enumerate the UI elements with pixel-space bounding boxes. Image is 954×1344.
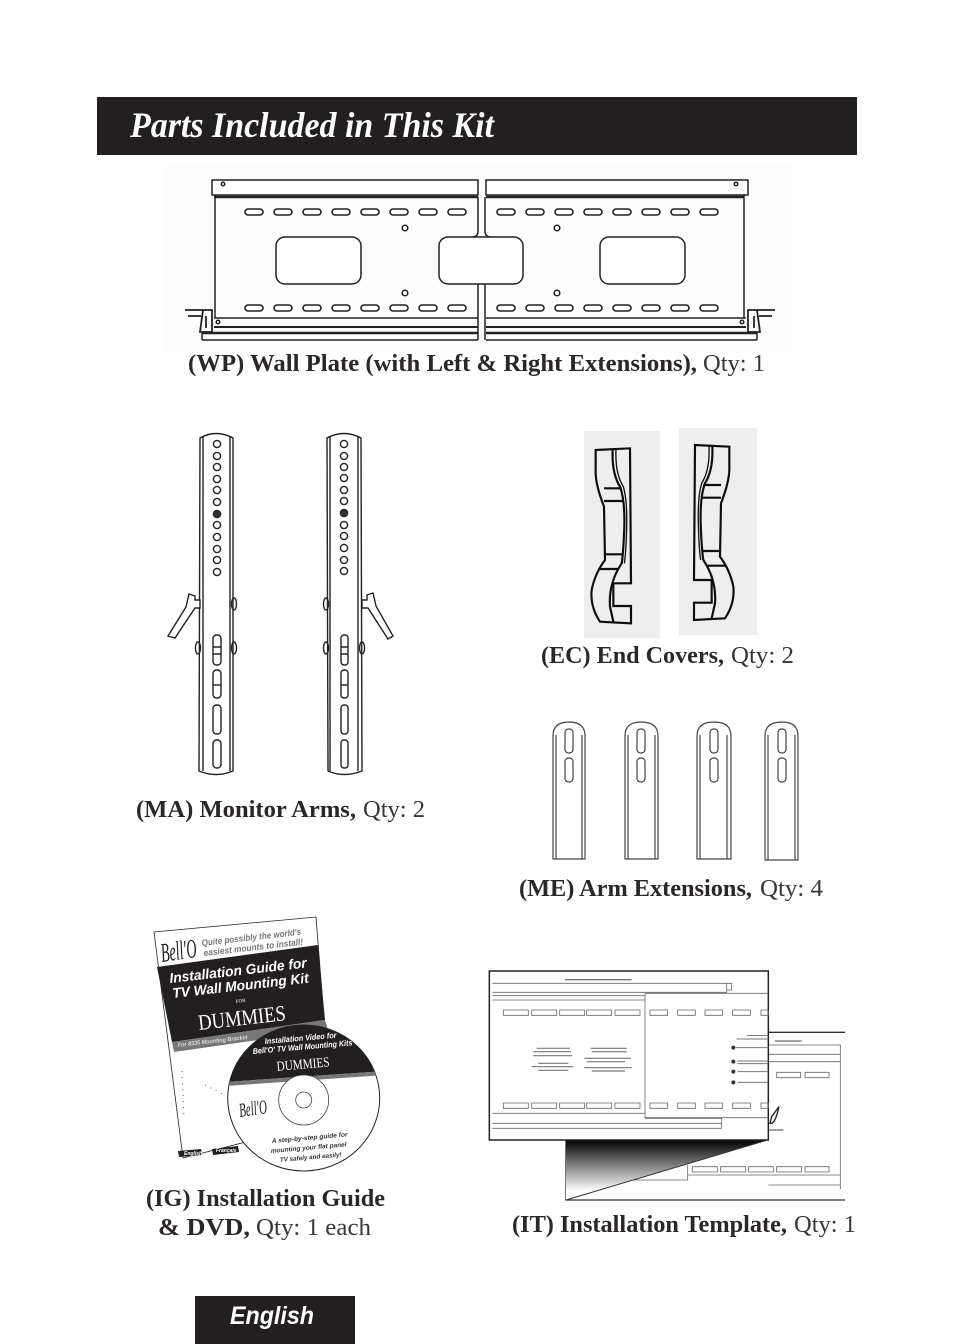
illustration: arm extensions bbox=[553, 722, 798, 860]
illustration: guide booklet: Bell'O bbox=[159, 933, 198, 968]
illustration: arm extension 1 bbox=[553, 722, 585, 859]
illustration: arm extension 2 bbox=[625, 722, 658, 859]
illustration: DVD disc: Bell'O' TV Wall Mounting Kits bbox=[252, 1038, 353, 1056]
illustration: DVD disc: A step-by-step guide for bbox=[271, 1131, 348, 1145]
language tab bbox=[195, 1296, 355, 1344]
illustration: end covers bbox=[584, 428, 757, 638]
illustration: DVD disc: Bell'O bbox=[238, 1096, 268, 1122]
illustration: arm extension 4 bbox=[765, 722, 798, 860]
illustration: guide booklet: easiest mounts to install! bbox=[203, 937, 304, 958]
illustration: right monitor arm bbox=[324, 434, 393, 774]
language tab: English bbox=[230, 1302, 314, 1330]
illustration: guide booklet: For 8335 Mounting Bracket bbox=[178, 1035, 249, 1049]
illustration: front sheet bbox=[489, 971, 768, 1140]
illustration: folded corner bbox=[566, 1140, 768, 1200]
illustration: DVD disc bbox=[225, 1020, 385, 1171]
illustration: guide booklet bbox=[154, 917, 332, 1158]
illustration: guide booklet: Français bbox=[216, 1148, 237, 1154]
label: installation guide and DVD: & DVD, bbox=[158, 1215, 250, 1241]
label: arm extensions: Qty: 4 bbox=[760, 876, 823, 902]
illustration: monitor arms bbox=[168, 434, 393, 774]
illustration: right end cover bbox=[694, 445, 734, 620]
illustration: DVD disc: Installation Video for bbox=[264, 1031, 338, 1046]
illustration: guide booklet: English bbox=[184, 1151, 202, 1157]
illustration: arm extension 3 bbox=[697, 722, 731, 859]
illustration: installation template bbox=[489, 971, 845, 1200]
title banner bbox=[97, 97, 857, 155]
illustration: wall plate bbox=[165, 165, 792, 353]
label: installation guide and DVD bbox=[146, 1186, 385, 1241]
illustration: guide booklet: Quite possibly the world's bbox=[201, 927, 302, 948]
label: installation guide and DVD: Qty: 1 each bbox=[256, 1215, 371, 1241]
illustration: left monitor arm bbox=[168, 434, 236, 774]
label: wall plate: Qty: 1 bbox=[703, 351, 765, 377]
label: monitor arms: (MA) Monitor Arms, bbox=[136, 797, 356, 823]
label: monitor arms: Qty: 2 bbox=[363, 797, 425, 823]
label: installation template: Qty: 1 bbox=[794, 1212, 856, 1238]
label: arm extensions: (ME) Arm Extensions, bbox=[519, 876, 752, 902]
label: wall plate: (WP) Wall Plate (with Left & Right Extensions), bbox=[188, 351, 697, 377]
label: end covers: (EC) End Covers, bbox=[541, 643, 724, 669]
illustration: back sheet bbox=[566, 1032, 845, 1200]
illustration: guide booklet: TV Wall Mounting Kit bbox=[172, 969, 311, 1001]
title banner: Parts Included in This Kit bbox=[129, 105, 495, 145]
illustration: left end cover bbox=[591, 448, 631, 623]
label: installation template: (IT) Installation Template, bbox=[512, 1212, 787, 1238]
illustration: guide booklet: FOR bbox=[236, 999, 247, 1005]
label: end covers: Qty: 2 bbox=[731, 643, 794, 669]
illustration: DVD disc: mounting your flat panel bbox=[271, 1141, 347, 1155]
illustration: installation guide and DVD bbox=[154, 917, 385, 1171]
illustration: guide booklet: DUMMIES bbox=[197, 1000, 287, 1035]
illustration: DVD disc: TV safely and easily! bbox=[280, 1152, 343, 1164]
label: installation guide and DVD: (IG) Installation Guide bbox=[146, 1186, 385, 1212]
illustration: DVD disc: DUMMIES bbox=[276, 1055, 330, 1075]
illustration: guide booklet: Installation Guide for bbox=[169, 954, 309, 986]
